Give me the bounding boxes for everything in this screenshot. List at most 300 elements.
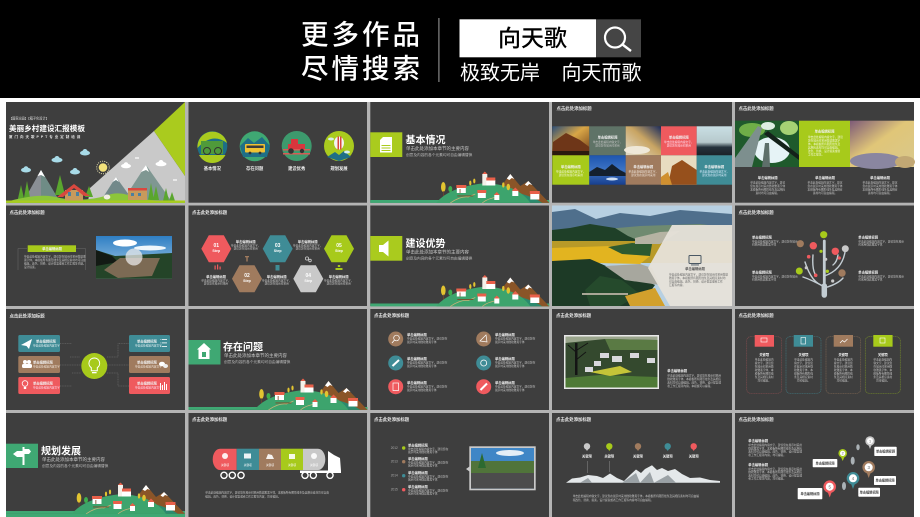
tile: slate: 单击编辑标题 <box>598 134 618 140</box>
slide title: 点击此处添加标题 <box>556 312 592 319</box>
photo: red mountain <box>552 126 589 155</box>
left text block 2: 单击编辑标题 <box>748 462 769 467</box>
tile: lime: 单击此处编辑内容文字， <box>556 170 586 174</box>
slide 9: full photo with hexagon <box>552 206 732 306</box>
icon: signpost <box>13 447 31 465</box>
box right 2: 单击此处编辑内容文字 <box>135 364 162 368</box>
text block bottom right: 单击此处编辑内容文字，建议您在展示 <box>858 274 904 278</box>
step text bottom: 单击此处编辑内容文字， <box>201 278 231 282</box>
card red: 软雅黑字体，本 <box>755 368 774 372</box>
village scene <box>6 482 185 514</box>
truck tank segments: 关键项 <box>288 463 296 467</box>
side text: 微软雅黑字体，本模板所有图形线条及其相应 <box>667 377 721 381</box>
tile: teal: 单击编辑标题 <box>704 164 725 169</box>
paragraph: 单击此处编辑内容文字，建议您在展示时采用微软雅黑字体，本模板所有图形线条及其相应素材均可自由 <box>205 490 329 494</box>
sheep <box>104 194 110 200</box>
section subtitle: 单击此处添加本章节的主要内容 <box>406 145 469 152</box>
card red: 关键项 <box>759 352 770 357</box>
card lime: 关键项 <box>878 352 888 357</box>
left text block 2: 单击此处编辑内容文字，建议您在展示时采用 <box>748 467 802 471</box>
toc labels: 存在问题 <box>246 165 264 172</box>
timeline: 2014 <box>391 474 398 478</box>
tile: lime <box>552 155 589 185</box>
card brown: 条及其相应素材 <box>834 375 853 379</box>
text column 2: 单击编辑标题 <box>815 175 836 180</box>
section title: 存在问题 <box>223 340 263 354</box>
box left 3: 单击此处编辑内容文字 <box>33 386 60 390</box>
grey triangle <box>88 131 185 202</box>
label 4: 单击编辑标题 <box>860 489 880 494</box>
step text bottom: 建议您在展示时采用 <box>327 282 351 286</box>
timeline: 2012 <box>391 446 398 450</box>
slide 10: tree diagram <box>735 206 914 306</box>
divider <box>438 18 440 82</box>
text column 1: 本模板所有图形线条及其相应 <box>750 188 785 192</box>
box right 3 <box>129 377 170 394</box>
slide title: 点击此处添加标题 <box>10 209 45 216</box>
search box <box>460 19 596 57</box>
left text block 2: 素材均可自由编辑。改色、替换、设计提案或 <box>748 473 802 477</box>
photo: park road <box>466 446 536 490</box>
card brown: 均可编辑。 <box>837 378 850 382</box>
step text bottom: 单击此处编辑内容文字， <box>262 278 291 282</box>
header band <box>0 0 920 98</box>
tile: slate <box>589 126 626 155</box>
item column right: 单击编辑标题 <box>495 380 515 385</box>
section subtitle: 单击此处添加本章节的主要内容 <box>42 456 105 463</box>
text column 2: 素材均可自由编辑。 <box>813 191 837 195</box>
card lime: 均可编辑。 <box>876 378 890 382</box>
card brown: 软雅黑字体，本 <box>834 368 853 372</box>
mountain range <box>566 465 720 483</box>
paragraph <box>24 254 86 269</box>
step text bottom: 建议您在展示时采用 <box>204 282 228 286</box>
box left 2: 单击编辑标题 <box>33 360 53 364</box>
text block bottom left <box>752 270 798 282</box>
ground extension <box>6 514 185 517</box>
box left 3: 单击编辑标题 <box>33 380 53 386</box>
label 2 <box>813 459 837 467</box>
item column right: 展示时采用微软雅黑字体 <box>495 340 525 344</box>
text column 2: 单击此处编辑内容文字，建议 <box>808 180 843 184</box>
red roof house <box>57 184 90 202</box>
slide 2: table of contents <box>188 102 367 203</box>
hex 01: 01 <box>214 243 219 249</box>
frame lines <box>18 248 86 270</box>
icon: balloon <box>324 131 354 161</box>
step text top <box>231 239 322 250</box>
tile: lime text: 您在展示时采用微软雅黑字 <box>808 138 841 142</box>
timeline: 2015 <box>391 488 398 492</box>
label 4 <box>858 488 880 497</box>
hexagon panel <box>648 225 732 306</box>
step text bottom: 建议您在展示时采用 <box>265 282 289 286</box>
tile: lime: 单击编辑标题 <box>561 164 581 169</box>
photo: forest <box>735 121 799 167</box>
truck tank segments <box>213 449 325 470</box>
truck tank segments: 关键项 <box>266 463 274 467</box>
section title: 建设优势 <box>406 237 446 250</box>
paragraph: 单击此处编辑内容文字，建议您在展示时采用微软雅黑字体，本模板所有图形线条及其相应素材均可自由编 <box>573 494 699 498</box>
timeline: 展示时采用微软雅黑字体 <box>408 478 438 482</box>
paragraph: 设计提案。 <box>24 265 37 269</box>
slide title: 点击此处添加标题 <box>738 416 774 423</box>
step text top: 单击编辑标题 <box>236 239 256 244</box>
text block top right: 单击编辑标题 <box>858 234 879 240</box>
step text top: 单击此处编辑内容文字， <box>231 244 260 248</box>
box right 1: 单击此处编辑内容文字 <box>135 344 162 348</box>
card red: 容文字，建议您 <box>755 361 774 365</box>
hex 02: Step <box>243 279 252 283</box>
slide 18: timeline with photo <box>370 413 549 517</box>
left text block 1: 单击编辑标题 <box>748 438 769 443</box>
tile: lime text: 单击编辑标题 <box>815 128 835 134</box>
toc labels: 规划发展 <box>330 165 348 172</box>
slide 1: cover <box>6 102 185 203</box>
item column left: 单击编辑标题 <box>407 380 427 385</box>
section title: 规划发展 <box>41 444 81 458</box>
pin labels <box>582 454 699 458</box>
card brown: 单击此处编辑内 <box>834 358 853 362</box>
village scene <box>370 172 549 203</box>
text block bottom right: 单击编辑标题 <box>858 270 879 274</box>
tile: lime text <box>799 121 850 167</box>
section tile <box>188 340 220 364</box>
pin icons <box>584 443 697 451</box>
slide 3: section basic situation <box>370 102 549 203</box>
photo: rice terraces <box>552 206 732 306</box>
step text bottom: 单击编辑标题 <box>329 274 349 279</box>
text column 1: 单击编辑标题 <box>758 175 778 180</box>
tile: slate: 建议您在展示时采用 <box>595 144 620 148</box>
text column 2: 您在展示时采用微软雅黑字体 <box>808 184 843 188</box>
tile: lime text: 单击此处编辑内容文字，建议 <box>808 135 843 139</box>
card brown: 容文字，建议您 <box>834 361 853 365</box>
text column 3: 单击编辑标题 <box>870 175 891 180</box>
card teal: 容文字，建议您 <box>794 361 813 365</box>
label 3 <box>874 476 896 485</box>
item column right: 单击此处编辑内容文字，建议您在 <box>495 360 536 364</box>
box left 2: 单击此处编辑内容文字 <box>33 364 60 368</box>
icon: document <box>380 137 392 152</box>
card red: 均可编辑。 <box>757 378 771 382</box>
card brown <box>826 335 861 393</box>
tagline right: 向天而歌 <box>562 62 642 84</box>
card teal: 在展示时采用微 <box>794 364 813 368</box>
timeline: 单击编辑标题 <box>408 484 428 489</box>
timeline: 展示时采用微软雅黑字体 <box>408 492 438 496</box>
text block top left: 时采用微软雅黑字体 <box>752 242 776 246</box>
text column 3 <box>863 175 898 195</box>
mountains <box>23 165 172 202</box>
card teal: 模板所有图形线 <box>794 372 813 376</box>
box right 1: 单击编辑标题 <box>137 338 157 344</box>
hex 05 <box>324 235 354 262</box>
slide 14: framed photo <box>552 309 732 410</box>
tile: lime text: 工作汇报等。 <box>808 152 824 156</box>
icon: bicycle <box>197 131 227 163</box>
step text top: 建议您在展示时采用 <box>296 246 320 250</box>
text column 1: 您在展示时采用微软雅黑字体 <box>750 184 785 188</box>
slide 8: section advantages <box>370 206 549 306</box>
paragraph: 黑字体，本模板所有图形线条及其相应素材均可自由 <box>24 258 86 262</box>
tile: slate: 单击此处编辑内容文字， <box>593 140 622 144</box>
section description: 创意及内容的各个元素均可自由编辑替换 <box>224 359 291 364</box>
item column right: 单击编辑标题 <box>495 332 515 337</box>
lime triangle <box>154 102 185 176</box>
item column right: 展示时采用微软雅黑字体 <box>495 388 525 392</box>
label 5: 单击编辑标题 <box>800 491 820 496</box>
left text block 2 <box>748 462 802 481</box>
timeline: 单击此处编辑内容文字，建议您在 <box>408 460 449 464</box>
text column 3: 您在展示时采用微软雅黑字体 <box>863 184 898 188</box>
hills <box>6 193 185 203</box>
tile: lime text: 体，本模板所有图形线条及 <box>808 142 841 146</box>
card red: 单击此处编辑内 <box>755 358 774 362</box>
village scene <box>188 378 368 410</box>
slide 16: section planning <box>6 413 185 517</box>
slide 15: four cards <box>735 309 914 410</box>
text block top left: 单击编辑标题 <box>752 234 772 240</box>
paragraph: 辑改色、替换、提案。设计提案或者工作汇报等内容均可自由编辑。 <box>573 498 653 502</box>
slide title: 点击此处添加标题 <box>556 105 592 112</box>
box left 1 <box>18 335 60 352</box>
section tile <box>370 236 402 261</box>
timeline: 展示时采用微软雅黑字体 <box>408 450 438 454</box>
section description: 创意及内容的各个元素均可自由编辑替换 <box>406 256 473 260</box>
section tile <box>370 132 402 157</box>
search icon button <box>596 19 641 57</box>
card lime: 条及其相应素材 <box>873 375 893 379</box>
timeline <box>391 442 449 496</box>
pin 3: 3 <box>867 465 870 470</box>
slide 6: intro with photo <box>6 206 185 306</box>
item column left: 单击编辑标题 <box>407 332 427 337</box>
tile: lime text: 改色、替换、设计提案或者 <box>808 149 841 153</box>
text column 3: 本模板所有图形线条及其相应 <box>863 188 898 192</box>
tile: teal: 建议您在展示时采用 <box>702 173 727 177</box>
tile: red <box>661 126 697 155</box>
slide 19: mountain pins <box>552 413 732 517</box>
photo: dusk sky <box>697 126 732 155</box>
pin labels: 关键项 <box>604 454 615 458</box>
paragraph: 编辑。改色、替换、设计提案或者工作汇报等内容，均可编辑。 <box>205 494 281 498</box>
left text block 1: 微软雅黑字体，本模板所有图形线条及其相应 <box>748 446 802 450</box>
hex 03: 03 <box>275 243 281 249</box>
timeline: 单击此处编辑内容文字，建议您在 <box>408 447 449 451</box>
connectors <box>60 344 129 386</box>
tile: teal: 单击此处编辑内容文字， <box>700 170 729 174</box>
sun <box>97 161 109 174</box>
panel text: 单击编辑标题 <box>685 266 706 271</box>
box right 1 <box>129 335 170 352</box>
card teal: 单击此处编辑内 <box>794 358 813 362</box>
timeline: 单击编辑标题 <box>408 442 428 448</box>
pin 1 <box>865 436 875 449</box>
step text bottom: 单击此处编辑内容文字， <box>324 278 353 282</box>
card lime: 单击此处编辑内 <box>873 358 893 362</box>
timeline: 单击编辑标题 <box>408 456 428 461</box>
card brown: 模板所有图形线 <box>834 372 853 376</box>
hex 02 <box>232 265 262 292</box>
toc labels: 建设优秀 <box>288 165 306 172</box>
side text: 单击此处编辑内容文字，建议您在展示时采用 <box>667 374 721 378</box>
side text: 素材均可自由编辑。改色、替换、设计提案或 <box>667 380 721 384</box>
step text bottom: 单击编辑标题 <box>206 274 227 279</box>
hex 03 <box>263 235 293 262</box>
box right 2: 单击编辑标题 <box>137 360 157 364</box>
slide 7: hexagon steps <box>188 206 367 306</box>
toc labels: 基本情况 <box>204 165 222 172</box>
truck tank segments: 关键项 <box>221 463 229 467</box>
card lime <box>865 335 900 393</box>
panel text: 汇报等内容。 <box>669 283 685 287</box>
box right 3: 单击编辑标题 <box>137 380 157 386</box>
slogan line one: 更多作品 <box>301 19 423 50</box>
slide 11: bulb diagram <box>6 309 185 410</box>
timeline: 单击此处编辑内容文字，建议您在 <box>408 474 449 478</box>
card teal: 条及其相应素材 <box>794 375 813 379</box>
paragraph: 单击此处编辑内容文字，建议您在展示时采用微软雅 <box>24 254 86 258</box>
box right 3: 单击此处编辑内容文字 <box>135 386 162 390</box>
card red <box>747 335 782 393</box>
box left 3 <box>18 377 60 394</box>
slide title: 点击此处添加标题 <box>556 416 592 423</box>
timeline: 2013 <box>391 460 398 464</box>
icon: speaker <box>379 240 388 256</box>
photo: blue water <box>589 155 626 185</box>
hex 04: 04 <box>306 273 311 279</box>
small step icons <box>214 256 342 270</box>
slide title: 点击此处添加标题 <box>738 209 774 216</box>
text block top right <box>858 234 904 246</box>
step text bottom <box>201 274 353 286</box>
pin labels: 关键项 <box>689 454 699 458</box>
card teal: 关键项 <box>799 352 809 357</box>
slide title: 点击此处添加标题 <box>192 209 228 216</box>
box left 2 <box>18 356 60 373</box>
pin 5 <box>823 480 836 498</box>
left text block 1: 者工作汇报等内容，均可编辑。 <box>748 453 786 457</box>
photo: hillside houses <box>564 335 659 389</box>
item column right: 单击编辑标题 <box>495 356 515 361</box>
truck cab <box>300 451 341 473</box>
box right 2 <box>129 356 170 373</box>
card red: 在展示时采用微 <box>755 364 774 368</box>
label 1 <box>874 447 897 456</box>
right house <box>128 188 147 200</box>
box left 1: 单击此处编辑内容文字 <box>33 344 60 348</box>
pin 5: 5 <box>828 484 831 489</box>
truck tank segments: 关键项 <box>310 463 318 467</box>
step text top: 单击编辑标题 <box>298 239 318 244</box>
card lime: 容文字，建议您 <box>873 361 893 365</box>
hex 03: Step <box>274 249 282 253</box>
card red: 条及其相应素材 <box>755 375 774 379</box>
text column 1: 单击此处编辑内容文字，建议 <box>750 180 785 184</box>
section subtitle: 单击此处添加本章节的主要内容 <box>224 352 287 359</box>
slide title: 点击此处添加标题 <box>10 312 45 320</box>
pin labels: 关键项 <box>633 454 644 458</box>
slide title: 点击此处添加标题 <box>374 416 410 423</box>
paragraph <box>205 490 329 498</box>
search box text: 向天歌 <box>498 25 567 51</box>
tile: brown: 建议您在展示时采用 <box>631 173 656 177</box>
pin labels: 关键项 <box>582 454 593 458</box>
slide 12: section problems <box>188 309 368 410</box>
cover title: 美丽乡村建设汇报模板 <box>9 123 85 133</box>
slide grid backing <box>6 102 914 517</box>
clouds <box>21 149 166 174</box>
card brown: 在展示时采用微 <box>834 364 853 368</box>
text block bottom right: 时采用微软雅黑字体 <box>858 278 883 282</box>
lime heading bar <box>28 245 76 252</box>
slide 20: map pins <box>735 413 914 517</box>
tile: brown: 单击此处编辑内容文字， <box>629 170 658 174</box>
truck tank segments: 关键项 <box>244 463 252 467</box>
cover labels: 【国家出品】【箱子化设计】 <box>9 116 49 120</box>
section subtitle: 单击此处添加本章节的主要内容 <box>406 248 469 255</box>
item column left: 展示时采用微软雅黑字体 <box>407 340 437 344</box>
leader lines <box>587 461 609 473</box>
item column left: 展示时采用微软雅黑字体 <box>407 364 437 368</box>
left text block 1 <box>748 438 802 457</box>
tile: brown: 单击编辑标题 <box>633 164 654 169</box>
tile: red: 单击此处编辑内容文字， <box>664 140 694 144</box>
label 3: 单击编辑标题 <box>875 478 895 483</box>
item column right <box>476 332 536 394</box>
panel text <box>669 266 728 287</box>
lime heading bar: 单击编辑标题 <box>42 246 63 251</box>
text block bottom left: 单击此处编辑内容文字，建议您在展示 <box>752 274 798 278</box>
panel text: 可自由编辑。改色、替换、设计提案或者工作 <box>669 280 723 284</box>
item column left: 单击此处编辑内容文字，建议您在 <box>407 360 448 364</box>
tree <box>796 231 849 295</box>
step text top: 建议您在展示时采用 <box>234 246 258 250</box>
hex 04: Step <box>304 279 313 283</box>
tile: teal <box>697 155 732 185</box>
item column left: 单击此处编辑内容文字，建议您在 <box>407 384 448 388</box>
hex 01 <box>201 235 231 262</box>
cover subtitle: 厦门向天歌PPT专业定制培训 <box>9 134 82 139</box>
item column right: 单击此处编辑内容文字，建议您在 <box>495 384 536 388</box>
slide 17: truck diagram <box>188 413 367 517</box>
panel text: 雅黑字体，本模板所有图形线条及其相应素材均 <box>669 276 726 280</box>
text block top left: 单击此处编辑内容文字，建议您在展示 <box>752 240 798 244</box>
pin 4: 4 <box>852 476 855 481</box>
photo: village aerial <box>96 236 172 279</box>
section tile <box>6 444 38 468</box>
text block bottom left: 时采用微软雅黑字体 <box>752 278 776 282</box>
toc labels <box>204 165 348 172</box>
pin 2 <box>838 449 847 461</box>
text column 3: 素材均可自由编辑。 <box>868 191 892 195</box>
text column 1 <box>750 175 785 195</box>
timeline: 单击此处编辑内容文字，建议您在 <box>408 488 449 492</box>
card lime: 在展示时采用微 <box>873 364 893 368</box>
item column right: 单击此处编辑内容文字，建议您在 <box>495 336 536 340</box>
label 1: 单击编辑标题 <box>876 448 896 454</box>
slide 5: forest split <box>735 102 915 203</box>
pin 2: 2 <box>842 452 844 456</box>
slogan line two: 尽情搜索 <box>301 53 423 84</box>
item column left: 展示时采用微软雅黑字体 <box>407 388 437 392</box>
tile: lime text: 其相应素材均可自由编辑。 <box>808 146 840 150</box>
grey stepping ovals <box>842 444 860 490</box>
slide title: 点击此处添加标题 <box>192 416 228 423</box>
photo: orange rock <box>661 155 697 185</box>
text column 2: 本模板所有图形线条及其相应 <box>808 188 843 192</box>
